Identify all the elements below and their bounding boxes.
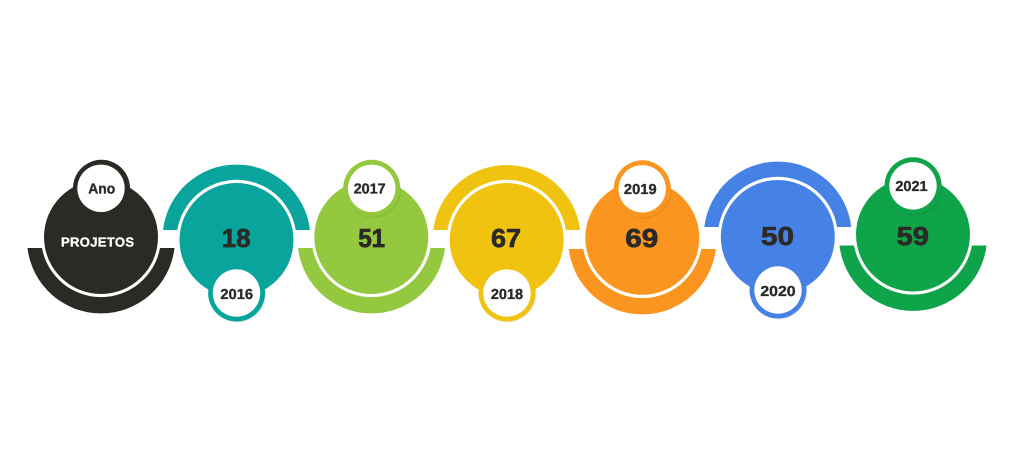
arc: blue top arc bbox=[704, 162, 851, 227]
badge: 2019: 2019 bbox=[624, 182, 657, 198]
arc: orange bottom arc bbox=[569, 249, 716, 314]
circle: teal main circle bbox=[180, 183, 294, 297]
badge: 2017: 2017 bbox=[354, 181, 386, 197]
arc: teal top arc bbox=[163, 165, 310, 230]
value: 69: 69 bbox=[625, 223, 658, 253]
circle: yellow main circle bbox=[450, 183, 564, 297]
badge: 2020 bbox=[750, 262, 808, 320]
circle: lime main circle bbox=[314, 180, 428, 294]
circle: green main circle bbox=[856, 178, 970, 292]
badge: 2017 bbox=[343, 160, 401, 218]
value: 59: 59 bbox=[897, 221, 929, 251]
arc: lime bottom arc bbox=[298, 248, 445, 313]
value: 50: 50 bbox=[761, 221, 794, 251]
badge: 2016: 2016 bbox=[220, 287, 253, 303]
badge: 2021: 2021 bbox=[895, 179, 928, 195]
badge: Ano: Ano bbox=[88, 181, 115, 197]
panel: 2021 bbox=[840, 157, 986, 311]
arc: yellow top arc bbox=[433, 165, 580, 230]
circle: dark main circle bbox=[44, 180, 158, 294]
badge: 2018 bbox=[478, 264, 536, 322]
arc: dark bottom arc bbox=[28, 248, 174, 313]
panel: 2017 bbox=[298, 160, 445, 313]
badge: 2016 bbox=[208, 264, 266, 322]
badge: Ano bbox=[73, 160, 130, 217]
circle: orange main circle bbox=[585, 181, 699, 295]
label: PROJETOS: PROJETOS bbox=[61, 234, 134, 250]
value: 67: 67 bbox=[491, 223, 521, 253]
badge: 2018: 2018 bbox=[491, 287, 523, 303]
badge: 2019 bbox=[614, 160, 672, 218]
panel: 2019 bbox=[569, 160, 716, 314]
value: 51: 51 bbox=[358, 223, 385, 253]
panel: 2018 bbox=[433, 165, 580, 322]
panel: 2020 bbox=[704, 162, 851, 320]
badge: 2020: 2020 bbox=[760, 284, 796, 300]
panel: header column Projetos / Ano bbox=[28, 160, 174, 313]
panel: 2016 bbox=[163, 165, 310, 322]
arc: green bottom arc bbox=[840, 246, 986, 311]
value: 18: 18 bbox=[222, 223, 251, 253]
circle: blue main circle bbox=[721, 180, 835, 294]
badge: 2021 bbox=[884, 157, 942, 216]
